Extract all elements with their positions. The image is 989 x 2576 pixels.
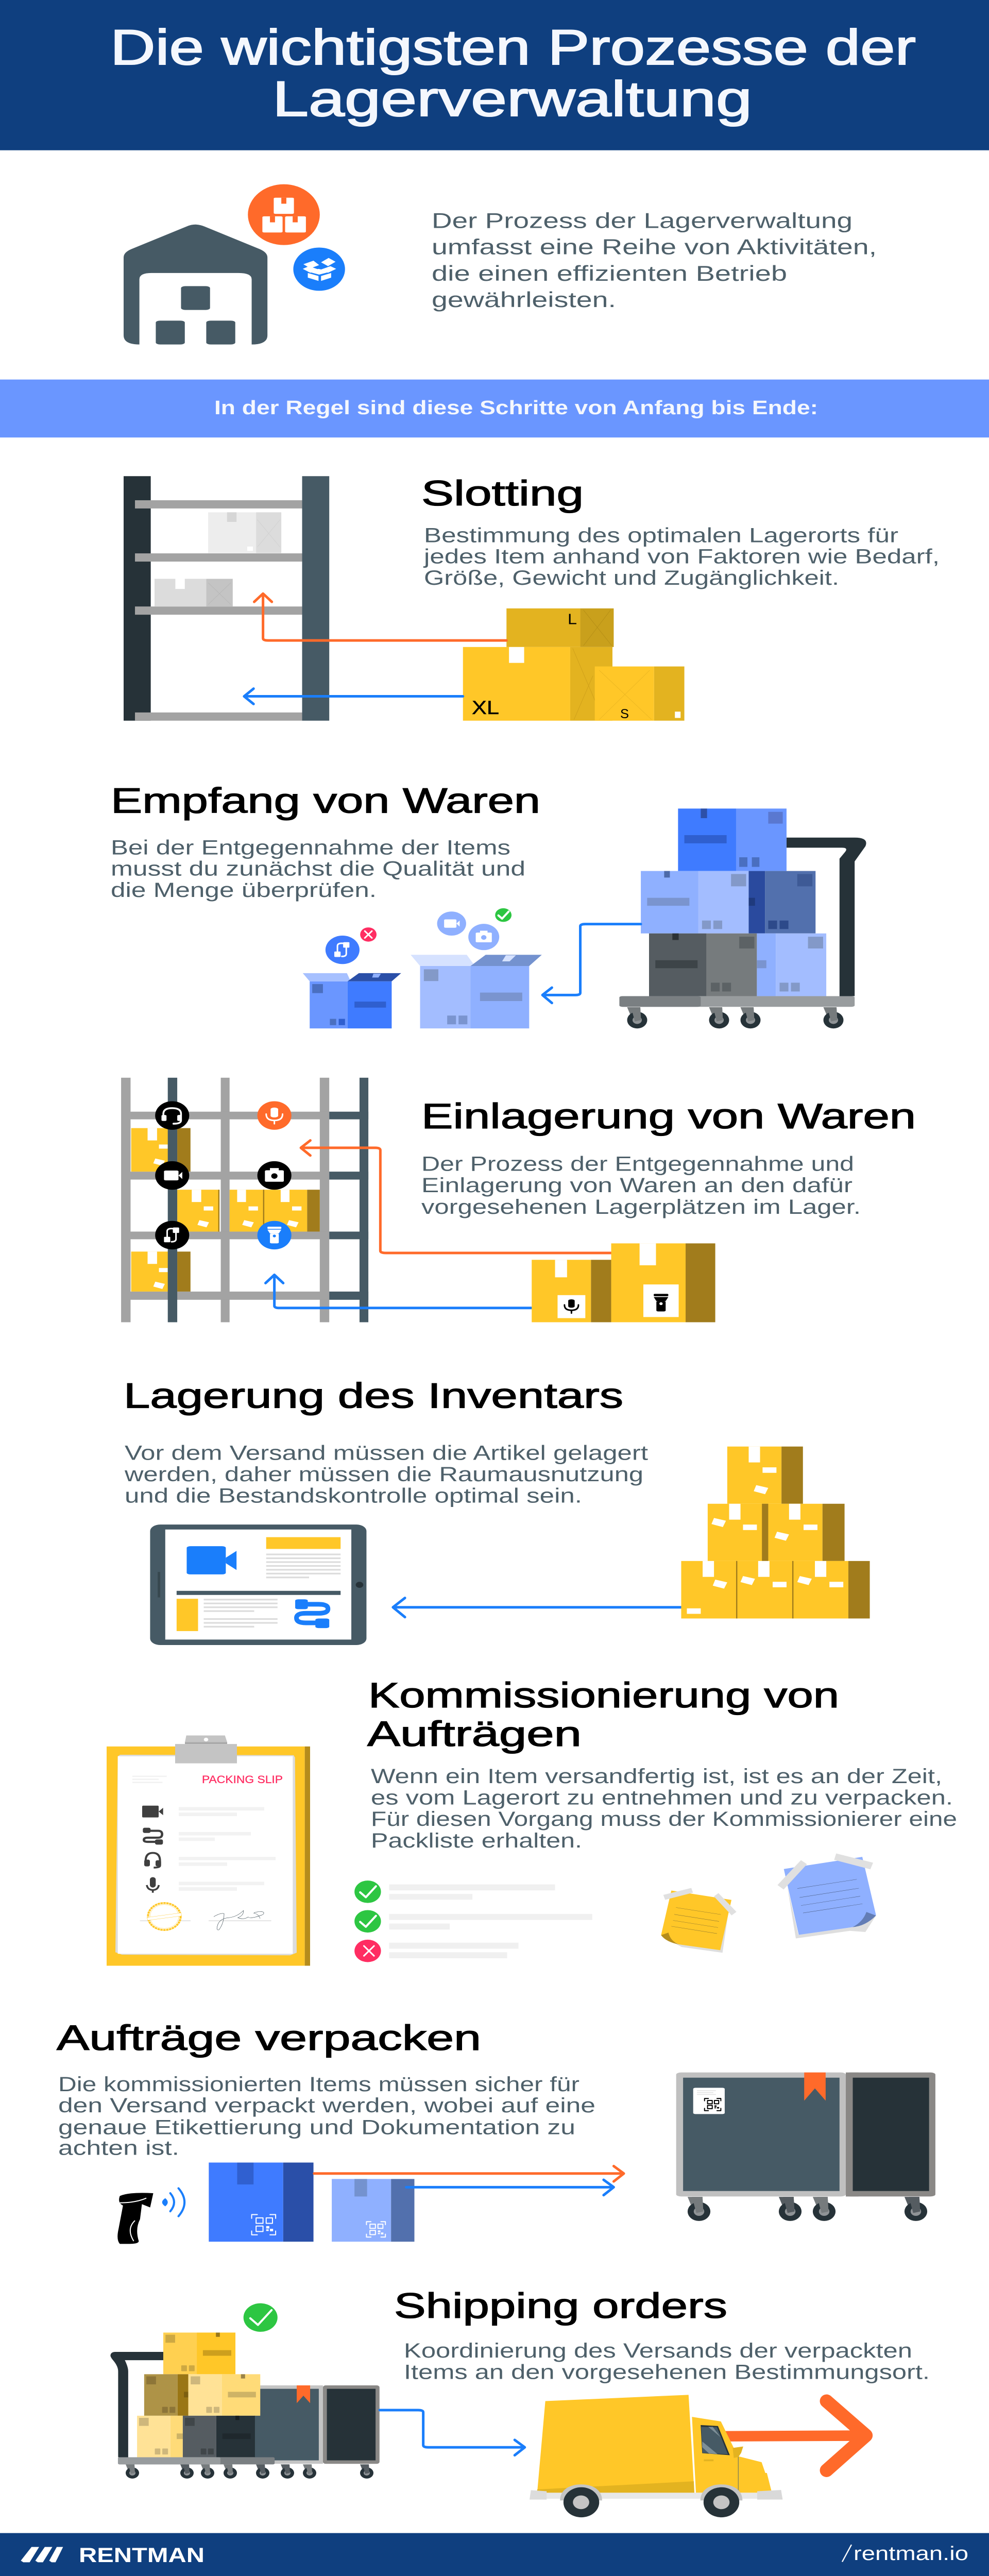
text: Slotting description: jedes Item anhand von Faktoren wie Bedarf, [423,545,940,568]
footer band [0,2533,989,2576]
panel: Slotting [124,473,940,721]
text: Lagerung description: Vor dem Versand müssen die Artikel gelagert [125,1442,648,1465]
logo: Rentman: RENTMAN [79,2544,204,2567]
text: Empfang description: musst du zunächst die Qualität und [111,857,525,880]
illustration: sticky notes [661,1854,876,1953]
text: Verpacken description: genaue Etikettierung und Dokumentation zu [58,2116,575,2139]
icon: warehouse with boxes [124,184,345,345]
text: Lagerung description: und die Bestandskontrolle optimal sein. [125,1484,582,1507]
illustration: clipboard packing slip: PACKING SLIP [202,1773,283,1785]
title: Die wichtigsten Prozesse der [110,19,916,75]
text: Shipping description [404,2340,930,2384]
text: Einlagerung description: Einlagerung von Waren an den dafür [421,1174,852,1197]
heading: Shipping orders: Shipping orders [394,2286,727,2326]
text: Lagerung description: werden, daher müssen die Raumausnutzung [124,1463,643,1486]
banner [0,380,989,437]
icon: green check [244,2303,278,2332]
website: rentman.io [854,2543,968,2564]
title: Lagerverwaltung [272,71,752,127]
heading: Kommissionierung von Aufträgen: Aufträgen [367,1715,582,1754]
text: Einlagerung description: vorgesehenen Lagerplätzen im Lager. [421,1196,861,1218]
text: Empfang description: die Menge überprüfen. [111,879,377,902]
illustration: tablet inventory [150,1524,366,1645]
text: Einlagerung description [421,1153,861,1218]
heading: Kommissionierung von Aufträgen: Kommissionierung von [368,1676,839,1715]
text: Shipping description: Items an den vorgesehenen Bestimmungsort. [404,2361,930,2384]
text: Empfang description: Bei der Entgegennahme der Items [111,836,510,859]
intro text: Der Prozess der Lagerverwaltung [432,208,852,233]
heading: Einlagerung von Waren: Einlagerung von Waren [421,1096,916,1136]
illustration: roll container cart [676,2073,935,2221]
text: Shipping description: Koordinierung des Versands der verpackten [404,2340,912,2362]
title [110,19,916,127]
text: Verpacken description: Die kommissionierten Items müssen sicher für [58,2073,579,2096]
list: check items [354,1880,592,1962]
text: Lagerung description [124,1442,648,1507]
text: Kommissionierung description: es vom Lagerort zu entnehmen und zu verpacken. [371,1786,953,1809]
illustration: delivery truck with arrow [530,2395,866,2517]
text: Empfang description [111,836,525,902]
arrow: orange to rack [301,1141,612,1253]
illustration: stacked boxes pyramid [681,1447,870,1618]
heading: Lagerung des Inventars: Lagerung des Inventars [124,1376,623,1415]
intro text: die einen effizienten Betrieb [432,261,787,285]
illustration: boxes L XL S: L [568,611,577,628]
illustration: cart with boxes [619,808,866,1028]
illustration: scanned boxes [209,2162,414,2242]
text: Kommissionierung description [371,1765,957,1852]
illustration: boxes L XL S: XL [472,697,499,718]
text: Slotting description: Größe, Gewicht und Zugänglichkeit. [424,567,839,589]
panel: Empfang von Waren [111,781,866,1028]
panel: Shipping orders [110,2286,930,2517]
illustration: clipboard packing slip [107,1735,310,1965]
arrow: blue to shelf [244,689,463,704]
text: Slotting description [423,524,940,589]
text: Kommissionierung description: Packliste erhalten. [371,1829,582,1852]
text: Verpacken description: achten ist. [58,2137,179,2160]
text: Kommissionierung description: Für diesen Vorgang muss der Kommissionierer eine [371,1808,957,1831]
heading: Kommissionierung von Aufträgen [367,1676,839,1754]
arrow: orange to cart [314,2166,624,2181]
panel: Kommissionierung von Aufträgen [107,1676,957,1965]
header band [0,0,989,150]
heading: Slotting: Slotting [421,473,584,513]
arrow: blue to rack [266,1275,532,1308]
heading: Empfang von Waren: Empfang von Waren [111,781,540,820]
text: Slotting description: Bestimmung des optimalen Lagerorts für [424,524,898,547]
banner: In der Regel sind diese Schritte von Anfang bis Ende: [214,397,818,418]
arrow: blue to cart [406,2180,613,2195]
illustration: inspected open boxes [303,908,542,1028]
heading: Aufträge verpacken: Aufträge verpacken [57,2019,481,2058]
illustration: boxes L XL S [463,608,685,721]
illustration: boxes L XL S: S [620,707,629,721]
arrow: orange to shelf [254,594,506,640]
arrow: blue to truck [380,2410,525,2455]
illustration: shelf rack [124,476,329,721]
panel: Einlagerung von Waren [121,1078,916,1322]
intro text: umfasst eine Reihe von Aktivitäten, [432,235,877,259]
text: Verpacken description: den Versand verpackt werden, wobei auf eine [58,2094,595,2117]
intro text [432,208,877,312]
panel: Aufträge verpacken [57,2019,935,2244]
text: Kommissionierung description: Wenn ein Item versandfertig ist, ist es an der Zeit, [371,1765,942,1788]
arrow: blue to tablet [393,1598,681,1617]
arrow: blue to open boxes [542,924,641,1003]
illustration: labelled boxes [532,1243,715,1322]
panel: introduction [124,184,877,345]
illustration: loaded cart [110,2332,380,2479]
icon: barcode scanner [117,2188,184,2244]
text: Verpacken description [58,2073,595,2160]
text: Einlagerung description: Der Prozess der Entgegennahme und [421,1153,854,1176]
intro text: gewährleisten. [432,287,616,312]
logo: Rentman [21,2544,204,2567]
illustration: rack with icons [121,1078,368,1322]
panel: Lagerung des Inventars [124,1376,870,1645]
